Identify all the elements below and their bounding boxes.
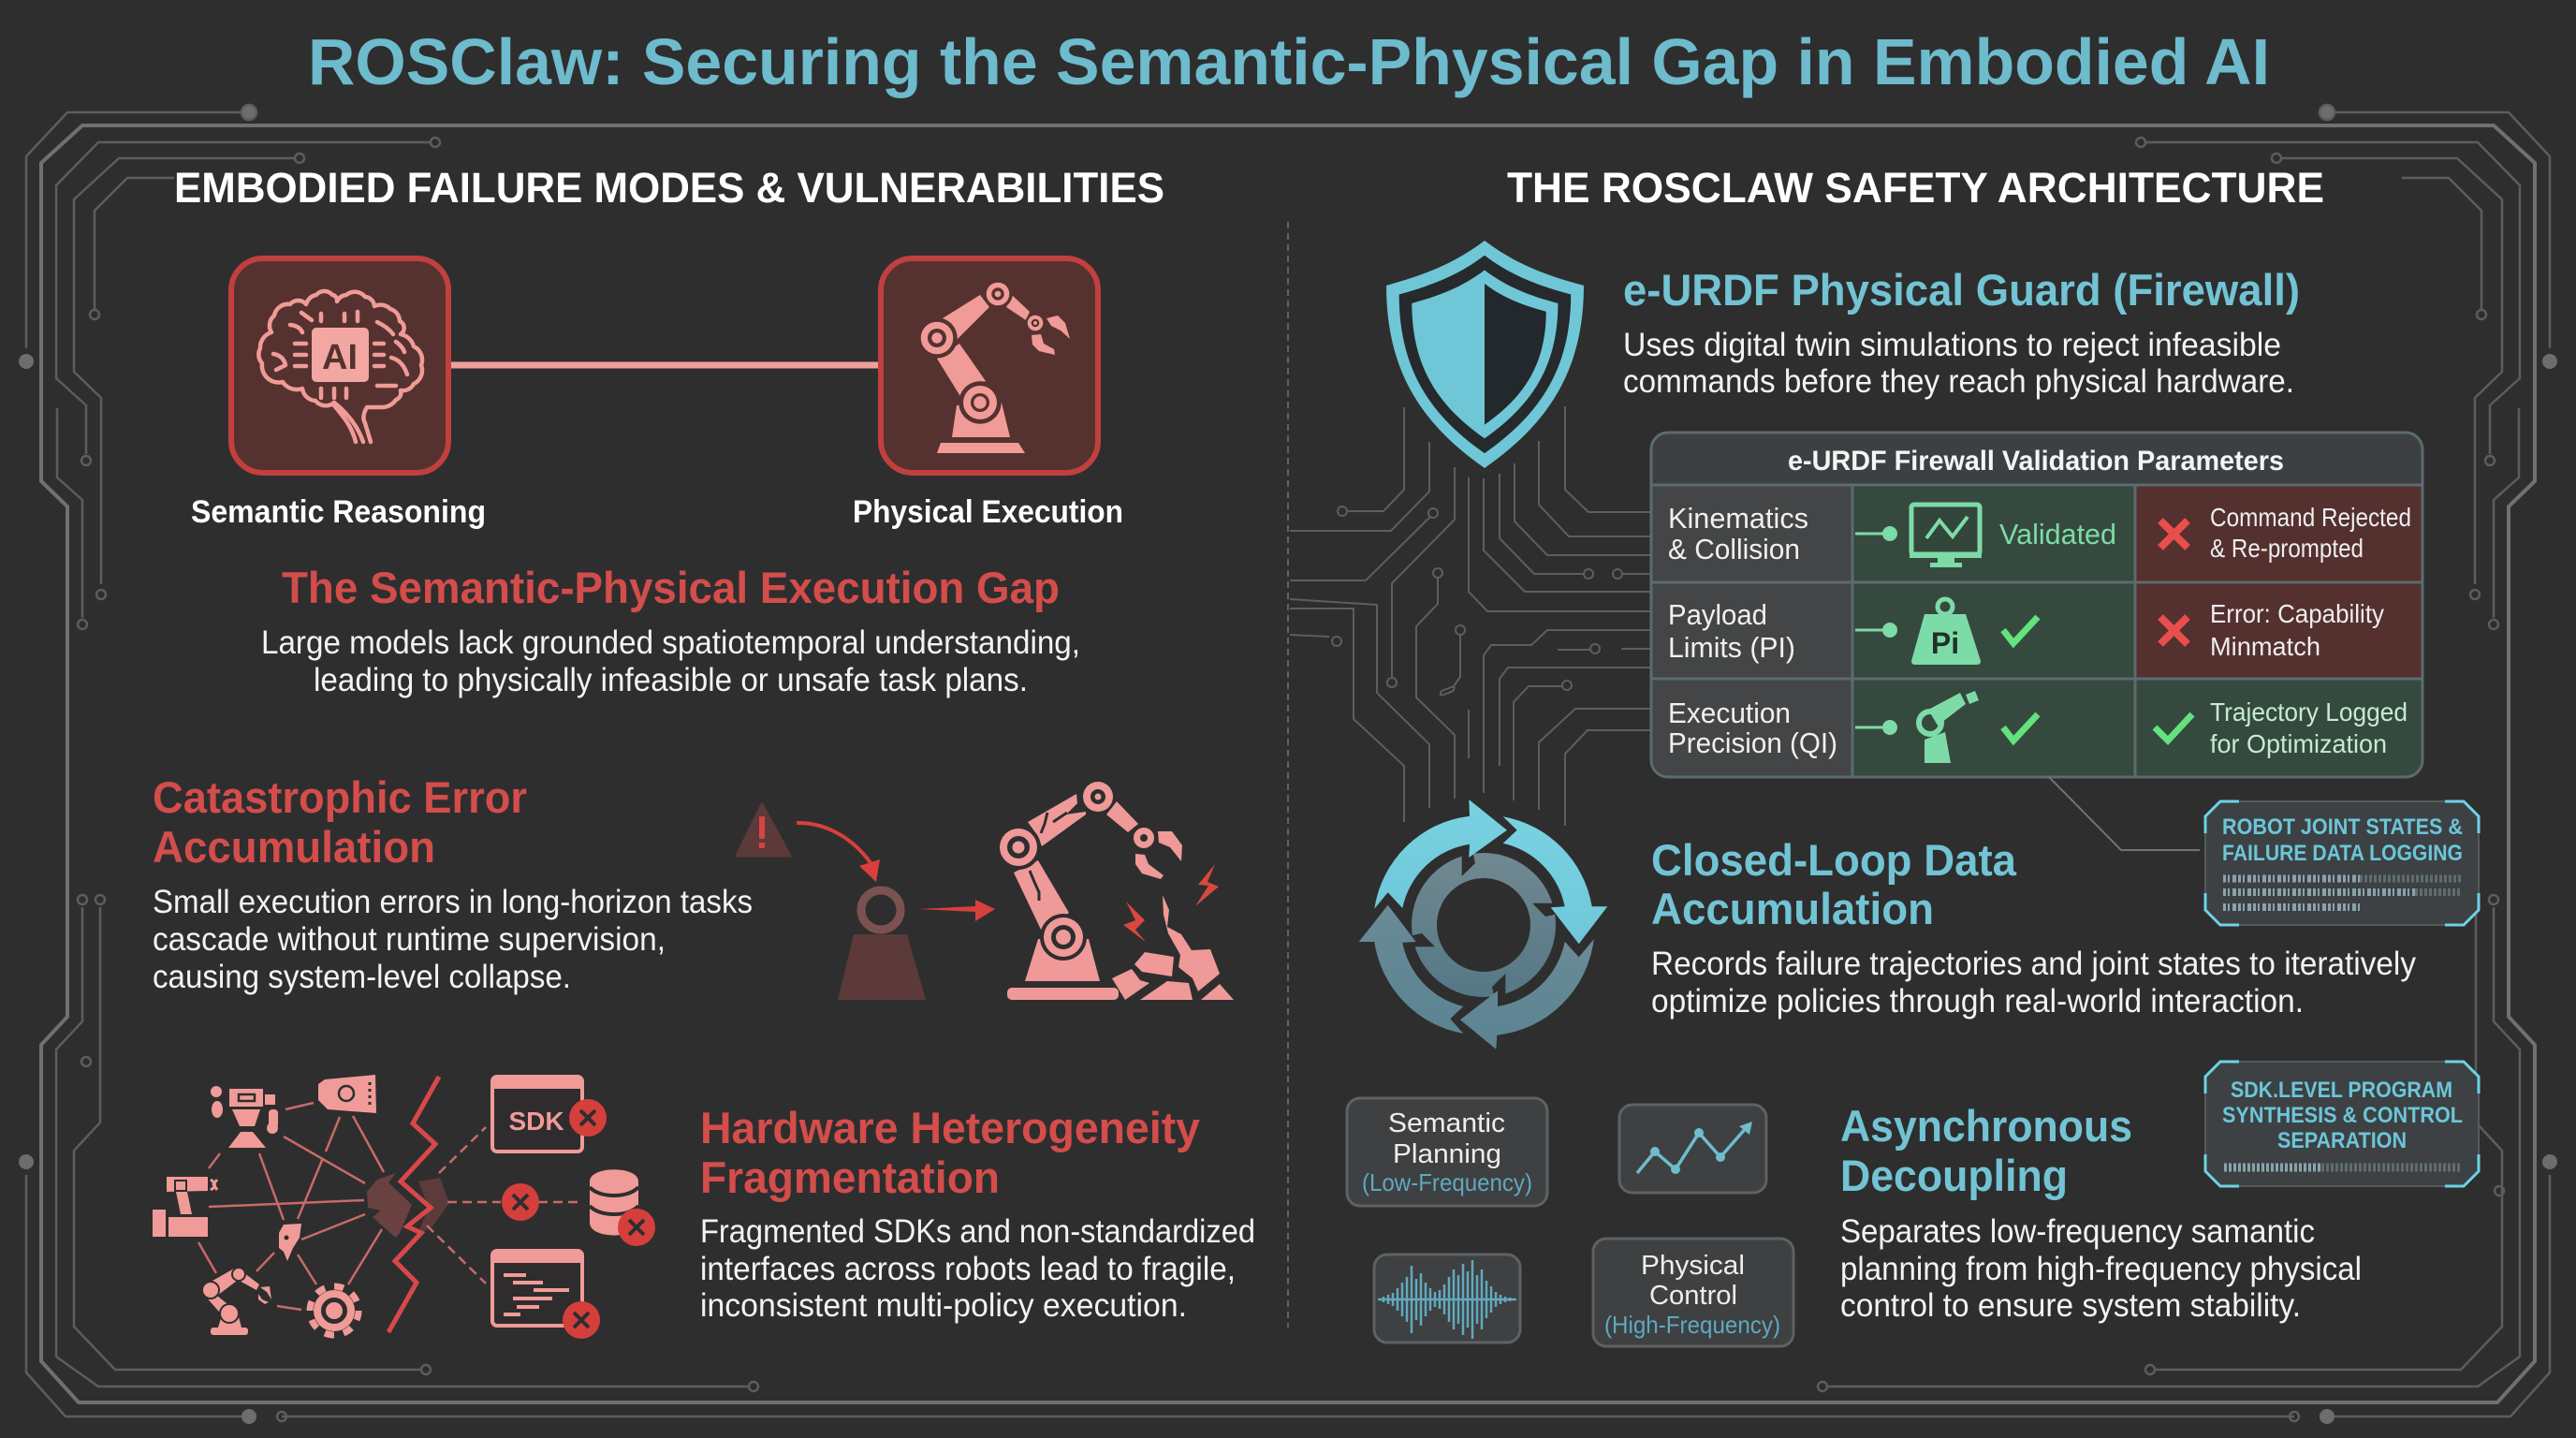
callout: joint states logging: ROBOT JOINT STATES & [2222,814,2463,840]
heading: execution gap: The Semantic-Physical Execution Gap [282,563,1060,612]
text: hardware description: interfaces across robots lead to fragile, [700,1251,1236,1287]
heading: physical guard: e-URDF Physical Guard (Firewall) [1623,265,2300,315]
heading: catastrophic error: Catastrophic Error [153,772,527,822]
text: command rejected: & Re-prompted [2210,534,2364,563]
heading: catastrophic error [153,772,527,872]
row label: execution precision: Precision (QI) [1668,726,1837,759]
icon: robot arm box [881,258,1098,473]
row label: kinematics [1668,502,1808,565]
arrow: warning to weight [797,823,880,882]
row label: kinematics: & Collision [1668,533,1800,565]
text: hardware description: Fragmented SDKs and non-standardized [700,1213,1255,1250]
icon: trajectory check [2155,714,2192,741]
icon: closed loop arrows [1359,800,1607,1049]
heading: asynchronous decoupling [1840,1101,2132,1200]
card: physical control: Control [1649,1281,1737,1311]
icon: rejected cross 1 [2160,521,2188,548]
icon: database error [590,1169,655,1246]
text: catastrophic description: Small execution errors in long-horizon tasks [153,884,753,920]
text: closed-loop description: Records failure trajectories and joint states to iteratively [1651,946,2416,982]
text: catastrophic description: causing system-level collapse. [153,959,571,995]
callout: SDK-level separation [2205,1062,2479,1186]
heading: hardware heterogeneity: Hardware Heterogeneity [700,1103,1200,1152]
card: semantic planning: (Low-Frequency) [1362,1168,1532,1196]
text: trajectory logged [2210,697,2408,758]
text: decoupling description: control to ensure system stability. [1840,1287,2301,1324]
text: trajectory logged: Trajectory Logged [2210,697,2408,726]
row label: payload: Limits (PI) [1668,631,1795,664]
icon: shield [1386,241,1584,468]
label: semantic reasoning: Semantic Reasoning [191,494,486,530]
icon: rejected cross 2 [2160,617,2188,644]
panel: embodied failure modes [153,164,1255,1339]
icon: precision arm with check [1855,691,2038,763]
icon: weight [838,890,926,1000]
heading: hardware heterogeneity: Fragmentation [700,1152,1000,1202]
text: decoupling description: planning from high-frequency physical [1840,1251,2362,1287]
text: decoupling description: Separates low-frequency samantic [1840,1213,2315,1250]
text: validated: Validated [1999,518,2116,550]
card: low-frequency chart [1619,1105,1766,1193]
heading: closed-loop [1651,835,2017,933]
text: gap description [261,624,1080,698]
text: guard description: Uses digital twin simulations to reject infeasible [1623,327,2281,363]
card: semantic planning: Semantic [1388,1108,1505,1138]
icon: SDK window error: SDK [508,1107,564,1136]
arrow: weight to broken robot [919,900,995,921]
heading: asynchronous decoupling: Asynchronous [1840,1101,2132,1151]
icon: payload weight with check: Pi [1931,626,1959,660]
heading: safety architecture: THE ROSCLAW SAFETY ARCHITECTURE [1507,164,2324,212]
text: catastrophic description: cascade without runtime supervision, [153,921,666,958]
card: semantic planning [1347,1098,1547,1206]
icon: AI brain box: AI [322,338,358,377]
callout: SDK-level separation: SDK.LEVEL PROGRAM [2231,1078,2452,1103]
text: trajectory logged: for Optimization [2210,729,2387,758]
icon: SDK window error [492,1077,607,1152]
heading: asynchronous decoupling: Decoupling [1840,1151,2068,1200]
icon: fragmented hardware network [153,1075,578,1335]
callout: SDK-level separation: SYNTHESIS & CONTROL [2222,1103,2463,1128]
table title: e-URDF Firewall Validation Parameters [1788,446,2284,477]
heading: hardware heterogeneity [700,1103,1200,1202]
icon: monitor with connector [1855,505,1982,567]
icon: AI brain box [231,258,448,473]
main title: ROSClaw: Securing the Semantic-Physical Gap in Embodied AI [308,25,2270,98]
row label: kinematics: Kinematics [1668,502,1808,535]
heading: closed-loop: Closed-Loop Data [1651,835,2017,885]
circuit traces behind shield [1290,406,1650,826]
callout: joint states logging: FAILURE DATA LOGGING [2222,841,2463,866]
text: capability error: Minmatch [2210,632,2320,661]
text: catastrophic description [153,884,753,995]
text: decoupling description [1840,1213,2362,1324]
icon: isolated X node [502,1183,539,1221]
icon: broken robot arm [996,779,1234,1000]
text: gap description: leading to physically infeasible or unsafe task plans. [314,662,1028,698]
text: command rejected: Command Rejected [2210,503,2411,532]
card: semantic planning: Planning [1393,1139,1501,1169]
text: gap description: Large models lack grounded spatiotemporal understanding, [261,624,1080,661]
row label: execution precision: Execution [1668,697,1791,729]
text: hardware description [700,1213,1255,1324]
table: firewall validation parameters [1651,433,2422,777]
text: closed-loop description: optimize policies through real-world interaction. [1651,983,2304,1020]
row label: payload [1668,598,1795,664]
text: guard description [1623,327,2294,400]
label: physical execution: Physical Execution [853,494,1123,530]
text: hardware description: inconsistent multi-policy execution. [700,1287,1187,1324]
row label: execution precision [1668,697,1837,759]
icon: code window error [492,1251,600,1339]
connector: table to logging box [2048,776,2200,850]
icon: warning triangle [737,804,790,856]
heading: failure modes: EMBODIED FAILURE MODES & VULNERABILITIES [174,164,1164,212]
text: guard description: commands before they reach physical hardware. [1623,363,2294,400]
callout: SDK-level separation: SEPARATION [2277,1128,2407,1153]
icon: payload weight with check [1855,599,2038,665]
card: physical control [1593,1239,1793,1346]
text: command rejected [2210,503,2411,563]
row label: payload: Payload [1668,598,1767,631]
callout: joint states logging [2205,801,2479,925]
text: closed-loop description [1651,946,2416,1020]
text: capability error [2210,599,2384,661]
connector: gap line [447,361,882,369]
card: high-frequency wave [1374,1255,1520,1343]
heading: closed-loop: Accumulation [1651,884,1934,933]
panel: ROSClaw safety architecture [1347,164,2479,1346]
card: physical control: (High-Frequency) [1604,1311,1780,1339]
heading: catastrophic error: Accumulation [153,822,435,872]
card: physical control: Physical [1641,1251,1745,1281]
text: capability error: Error: Capability [2210,599,2384,628]
